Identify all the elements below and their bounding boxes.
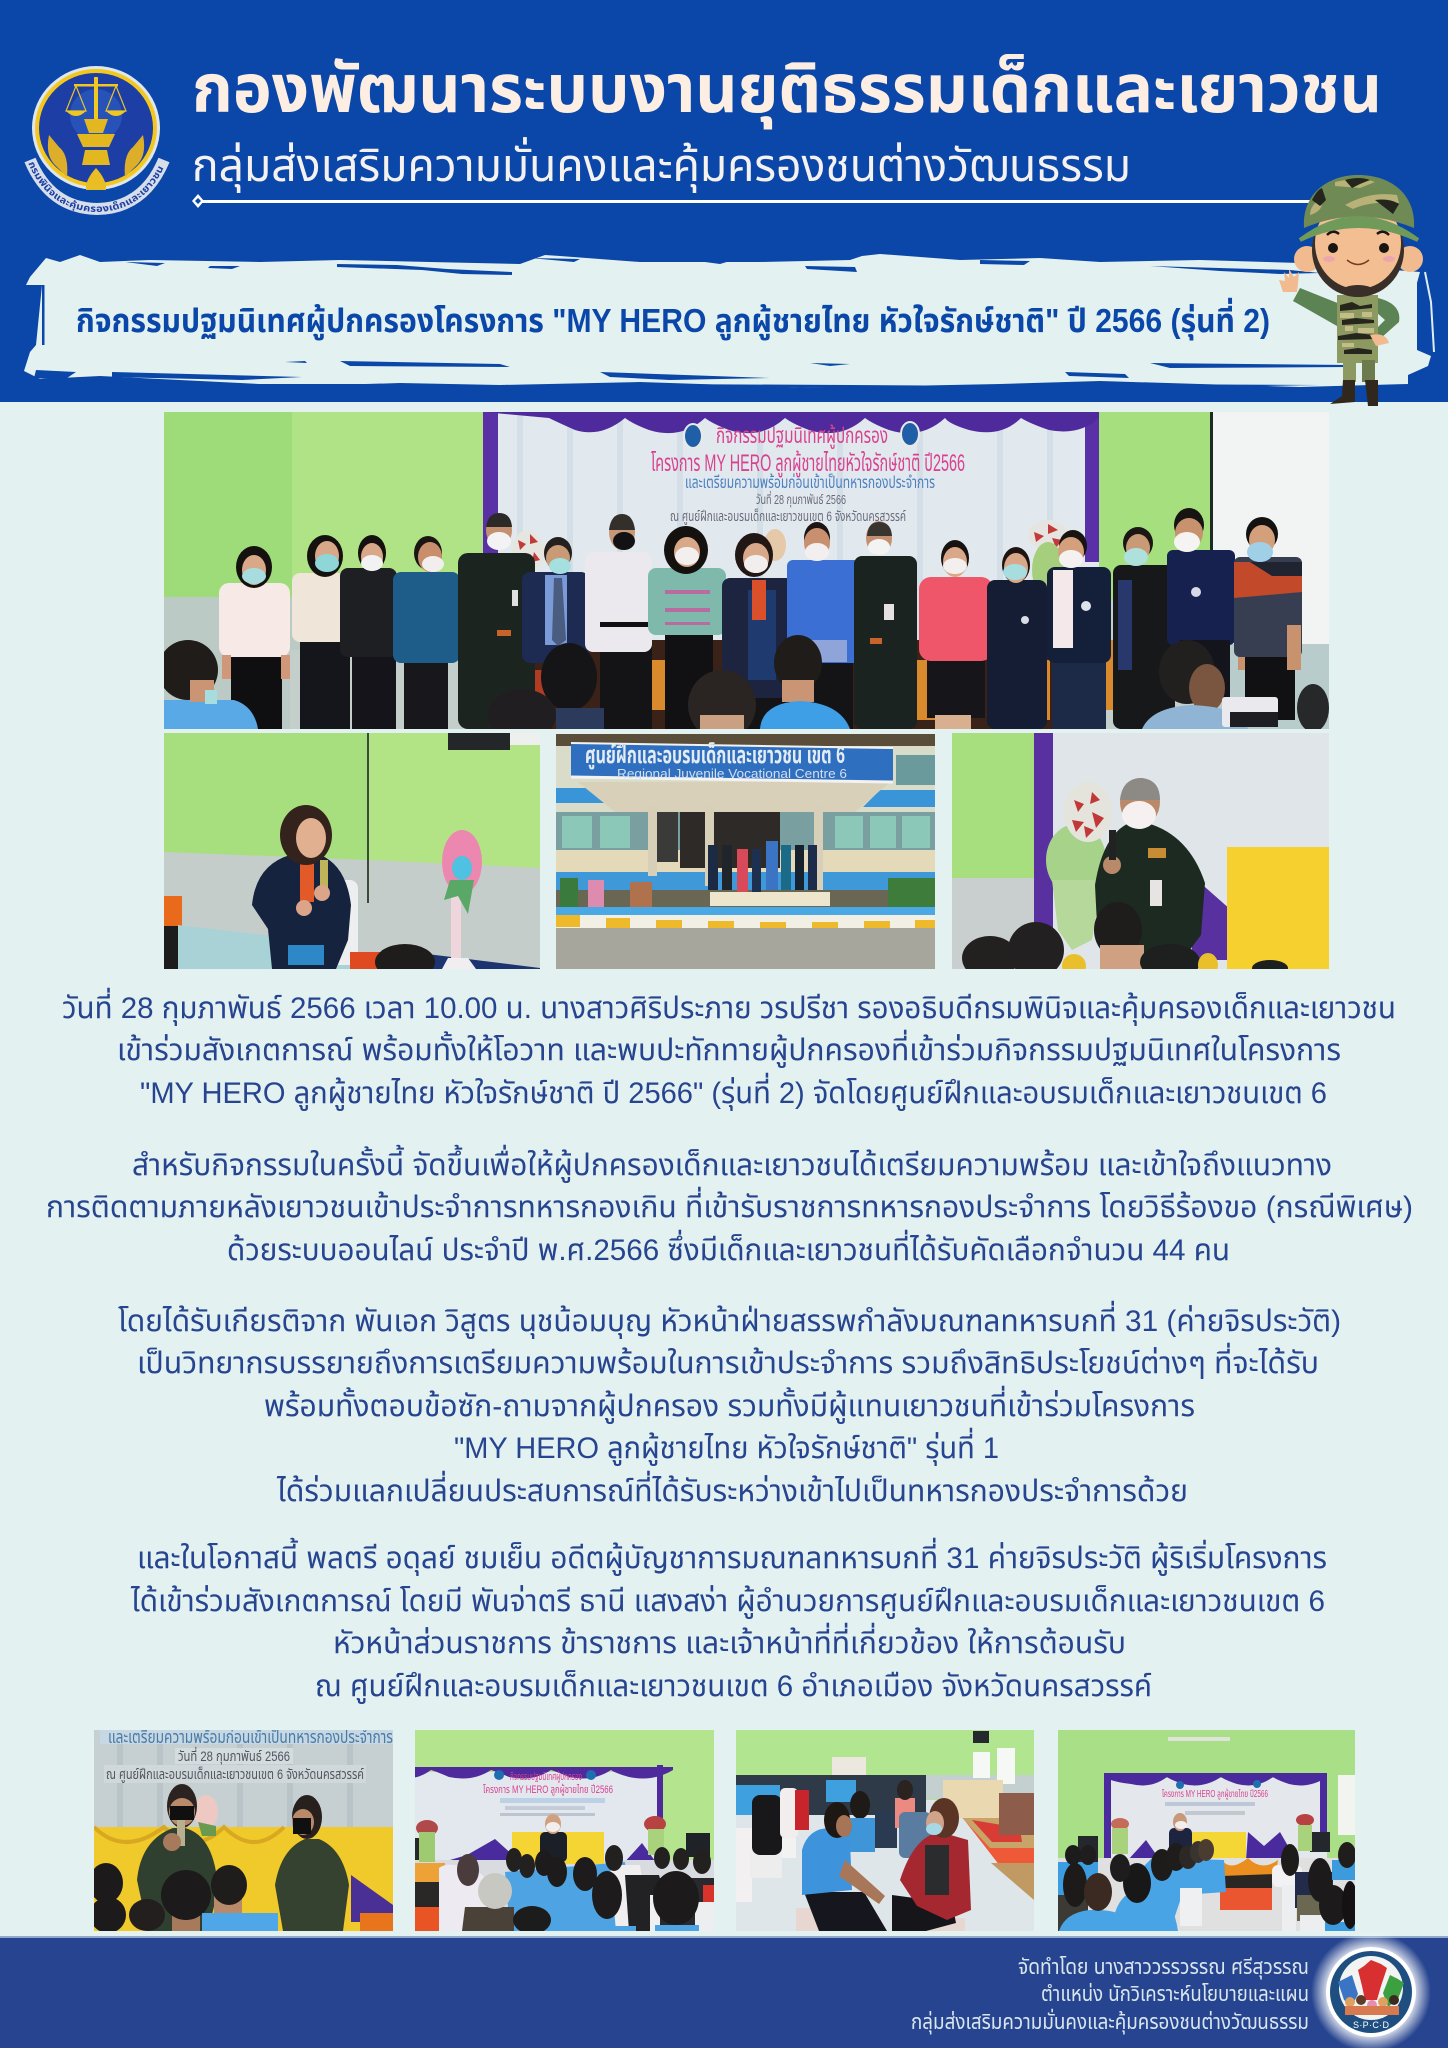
backdrop text: กิจกรรมปฐมนิเทศผู้ปกครอง [510, 1771, 582, 1783]
photo: juvenile vocational centre building [556, 734, 935, 969]
seated heads [89, 1863, 278, 1933]
speaker and flowers [1111, 1813, 1314, 1854]
paragraph 4: และในโอกาสนี้ พลตรี อดุลย์ ชมเย็น อดีตผู้บัญชาการมณฑลทหารบกที่ 31 ค่ายจิรประวัติ ผู้ริเริ่มโครงการ [137, 1537, 1327, 1576]
paragraph 3: เป็นวิทยากรบรรยายถึงการเตรียมความพร้อมในการเข้าประจำการ รวมถึงสิทธิประโยชน์ต่างๆ ที่จะได้รับ [137, 1342, 1319, 1380]
paragraph 1: วันที่ 28 กุมภาพันธ์ 2566 เวลา 10.00 น. นางสาวศิริประภาย วรปรีชา รองอธิบดีกรมพินิจและคุ้มครองเด็กและเยาวชน [62, 987, 1396, 1026]
person 8 [648, 526, 726, 729]
header rule with diamond [192, 194, 1318, 208]
paragraph 3: โดยได้รับเกียรติจาก พันเอก วิสูตร นุชน้อมบุญ หัวหน้าฝ่ายสรรพกำลังมณฑลทหารบกที่ 31 (ค่ายจิรประวัติ) [118, 1300, 1341, 1339]
backdrop signage text: และเตรียมความพร้อมก่อนเข้าเป็นทหารกองประจำการ [685, 472, 935, 492]
soldiers [137, 1784, 349, 1931]
backdrop signage text: กิจกรรมปฐมนิเทศผู้ปกครอง [716, 423, 888, 449]
person 14 [1047, 530, 1111, 729]
backdrop text: โครงการ MY HERO ลูกผู้ชายไทย ปี2566 [1162, 1788, 1268, 1800]
paragraph 2: สำหรับกิจกรรมในครั้งนี้ จัดขึ้นเพื่อให้ผู้ปกครองเด็กและเยาวชนได้เตรียมความพร้อม และเข้าใจถึงแนวทาง [132, 1144, 1332, 1183]
person 7 [585, 514, 652, 729]
speaker [540, 1814, 567, 1862]
floral arrangements [512, 520, 1068, 598]
backdrop text: โครงการ MY HERO ลูกผู้ชายไทย ปี2566 [483, 1784, 613, 1796]
person 2 [292, 535, 351, 729]
title: กองพัฒนาระบบงานยุติธรรมเด็กและเยาวชน [192, 51, 1382, 130]
banner texts on curtain [100, 1727, 393, 1783]
photo: woman speaking [164, 733, 540, 969]
person 17 [1234, 517, 1302, 720]
paragraph 4: ได้เข้าร่วมสังเกตการณ์ โดยมี พันจ่าตรี ธานี แสงสง่า ผู้อำนวยการศูนย์ฝึกและอบรมเด็กและเยาวชนเขต 6 [130, 1585, 1325, 1619]
seated pair [796, 1798, 971, 1931]
person 12 [919, 540, 993, 729]
person 16 [1167, 508, 1246, 700]
person 1 [219, 546, 290, 729]
paragraph 4 [130, 1537, 1327, 1704]
paragraph 2 [46, 1144, 1413, 1267]
person 15 [1113, 527, 1175, 729]
backdrop text [483, 1770, 613, 1816]
steps and forecourt [556, 878, 935, 969]
photo: army officer speaking [952, 733, 1329, 969]
audience [439, 1845, 714, 1934]
paragraph 2: ด้วยระบบออนไลน์ ประจำปี พ.ศ.2566 ซึ่งมีเด็กและเยาวชนที่ได้รับคัดเลือกจำนวน 44 คน [227, 1229, 1230, 1267]
speaker woman [252, 805, 435, 980]
paragraph 4: ณ ศูนย์ฝึกและอบรมเด็กและเยาวชนเขต 6 อำเภอเมือง จังหวัดนครสวรรค์ [315, 1670, 1152, 1704]
paragraph 3: พร้อมทั้งตอบข้อซัก-ถามจากผู้ปกครอง รวมทั้งมีผู้แทนเยาวชนที่เข้าร่วมโครงการ [264, 1385, 1195, 1424]
photo: audience facing stage 1 [415, 1730, 714, 1931]
backdrop text [1162, 1780, 1268, 1815]
person 3 [340, 535, 397, 729]
photo: audience facing stage 2 [1058, 1730, 1355, 1931]
backdrop signage text [651, 423, 965, 525]
flower stand [442, 830, 482, 914]
building sign [571, 742, 893, 782]
green wall and backdrop [164, 412, 1329, 729]
banner brush streaks [34, 258, 1420, 388]
seated crowd [736, 1775, 931, 1902]
backdrop signage text: วันที่ 28 กุมภาพันธ์ 2566 [756, 490, 846, 507]
person 6 [522, 537, 589, 663]
footer band [0, 1936, 1448, 2048]
paragraph 1 [62, 987, 1396, 1111]
footer credit line 3: กลุ่มส่งเสริมความมั่นคงและคุ้มครองชนต่างวัฒนธรรม [911, 2008, 1309, 2035]
seated audience foreground [158, 635, 1329, 741]
audience [1058, 1839, 1358, 1931]
flowers [1046, 782, 1112, 950]
people in front of building [708, 841, 817, 892]
emblem ribbon: กรมพินิจและคุ้มครองเด็กและเยาวชน [28, 162, 164, 212]
person 11 [854, 521, 917, 729]
paragraph 3: ได้ร่วมแลกเปลี่ยนประสบการณ์ที่ได้รับระหว่างเข้าไปเป็นทหารกองประจำการด้วย [276, 1470, 1188, 1508]
banner texts on curtain: วันที่ 28 กุมภาพันธ์ 2566 [178, 1746, 290, 1765]
photo: two soldiers speaking [94, 1727, 393, 1931]
torn paper title banner [24, 254, 1434, 388]
logo: SPCD round badge: S·P·C·D [1353, 2020, 1390, 2030]
audience heads [962, 902, 1288, 980]
flowers [416, 1816, 666, 1862]
person 5 [458, 513, 535, 729]
photo: parents and youths holding hands [736, 1730, 1034, 1931]
paragraph 4: หัวหน้าส่วนราชการ ข้าราชการ และเจ้าหน้าที่ที่เกี่ยวข้อง ให้การต้อนรับ [333, 1622, 1126, 1660]
icon: cartoon soldier mascot [1279, 175, 1423, 406]
person 13 [987, 547, 1047, 729]
person 10 [787, 522, 860, 729]
logo: SPCD round badge [1311, 1932, 1431, 2048]
subtitle: กลุ่มส่งเสริมความมั่นคงและคุ้มครองชนต่างวัฒนธรรม [192, 137, 1131, 193]
building sign: Regional Juvenile Vocational Centre 6 [617, 766, 847, 781]
building [556, 734, 935, 908]
backdrop crests [684, 422, 919, 448]
paragraph 3 [118, 1300, 1341, 1508]
header band [0, 0, 1448, 402]
paragraph 1: "MY HERO ลูกผู้ชายไทย หัวใจรักษ์ชาติ ปี 2566" (รุ่นที่ 2) จัดโดยศูนย์ฝึกและอบรมเด็กและเยาวชนเขต 6 [140, 1072, 1327, 1111]
army officer [1095, 778, 1205, 975]
person 4 [393, 536, 460, 729]
yellow podium [1227, 847, 1329, 969]
photo: group photograph of officials [164, 412, 1329, 729]
emblem: juvenile observation department seal [24, 66, 170, 215]
paragraph 3: "MY HERO ลูกผู้ชายไทย หัวใจรักษ์ชาติ" รุ่นที่ 1 [454, 1427, 999, 1466]
paragraph 2: การติดตามภายหลังเยาวชนเข้าประจำการทหารกองเกิน ที่เข้ารับราชการทหารกองประจำการ โดยวิธีร้องขอ (กรณีพิเศษ) [46, 1186, 1413, 1224]
backdrop signage text: โครงการ MY HERO ลูกผู้ชายไทยหัวใจรักษ์ชาติ ปี2566 [651, 450, 965, 478]
paragraph 1: เข้าร่วมสังเกตการณ์ พร้อมทั้งให้โอวาท และพบปะทักทายผู้ปกครองที่เข้าร่วมกิจกรรมปฐมนิเทศในโครงการ [117, 1029, 1341, 1068]
backdrop signage text: ณ ศูนย์ฝึกและอบรมเด็กและเยาวชนเขต 6 จังหวัดนครสวรรค์ [670, 508, 906, 525]
banner heading: กิจกรรมปฐมนิเทศผู้ปกครองโครงการ "MY HERO ลูกผู้ชายไทย หัวใจรักษ์ชาติ" ปี 2566 (รุ่นที่ 2) [76, 297, 1270, 341]
footer credit line 1: จัดทำโดย นางสาววรรวรรณ ศรีสุวรรณ [1018, 1956, 1309, 1980]
footer credit line 2: ตำแหน่ง นักวิเคราะห์นโยบายและแผน [1041, 1982, 1309, 2006]
people standing [219, 508, 1302, 729]
person 9 [722, 533, 796, 729]
